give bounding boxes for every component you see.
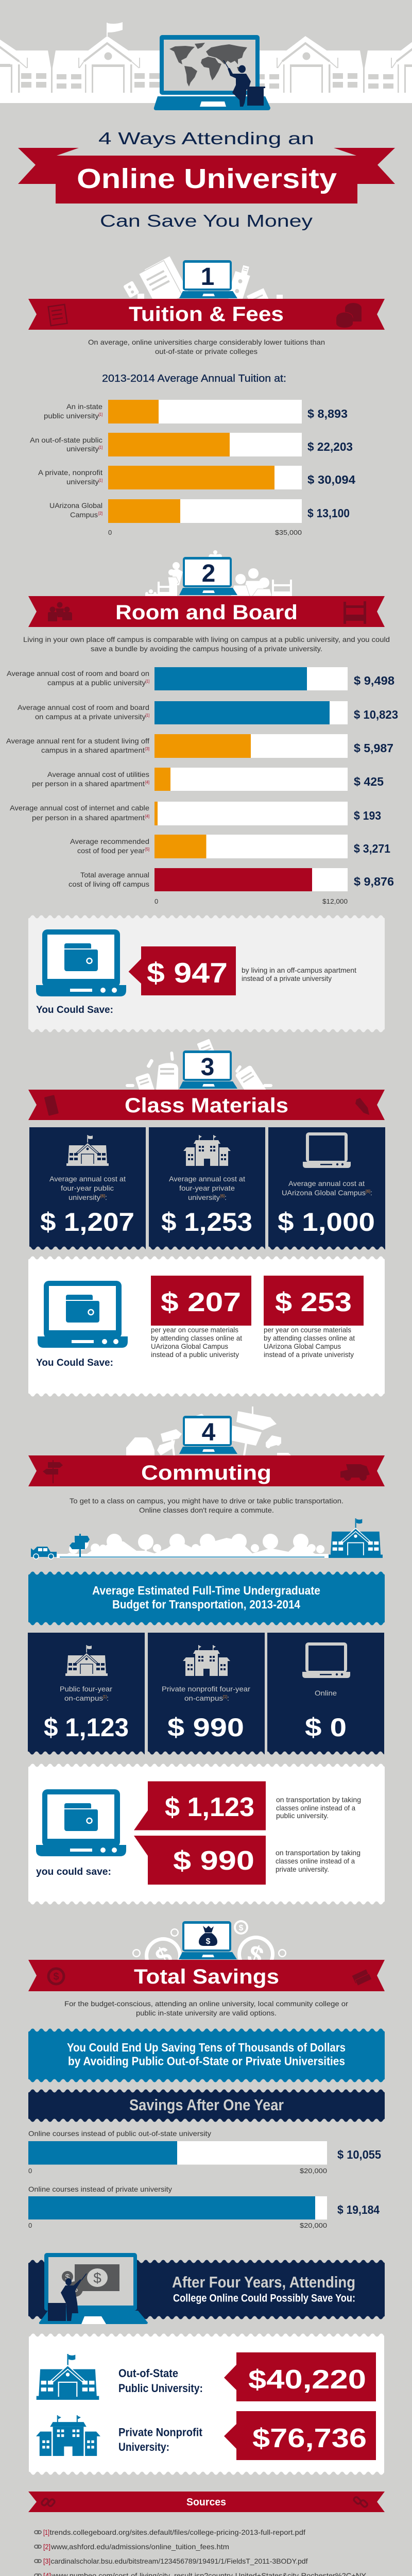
section 4 intro text: To get to a class on campus, you might have to drive or take public transportation. (70, 1497, 344, 1505)
savings box: 253: instead of a private univeristy (264, 1350, 354, 1359)
cost label: [6] (366, 1189, 370, 1194)
bar chart: savings out-of-state: $20,000 (300, 2167, 327, 2175)
bar row: food: $ 3,271 (354, 842, 390, 855)
icon: laptop number 1: 1 (201, 263, 214, 291)
cost panel: UArizona Global Campus (268, 1127, 385, 1250)
bar row: private room and board: [1] (146, 713, 149, 718)
price tag: 76,736 (224, 2411, 376, 2460)
section 2 heading: Room and Board (28, 550, 385, 627)
banner: Sources: Sources (186, 2497, 226, 2508)
bar chart: savings private (28, 2185, 380, 2229)
bar row: private nonprofit: $ 30,094 (307, 473, 355, 486)
illustration: road from car to campus (31, 1518, 383, 1559)
savings box: 207: instead of a public univeristy (151, 1350, 239, 1359)
savings note: classes online instead of a (276, 1804, 355, 1812)
title ribbon: Online University (18, 148, 395, 204)
icon: laptop with lecturer and money: $ (73, 2284, 78, 2294)
cost label: university (68, 1193, 100, 1201)
icon: school (65, 1645, 108, 1676)
bar row: food: Average recommended (70, 837, 149, 845)
chart heading: 2013-2014 Average Annual Tuition at: (102, 373, 286, 384)
icon: laptop (302, 1642, 350, 1678)
icon: laptop number 1 (179, 260, 237, 298)
cost label: four-year public (61, 1184, 114, 1192)
savings note: public university. (276, 1811, 329, 1820)
savings box: 253: per year on course materials (264, 1326, 351, 1334)
section 5 intro text: For the budget-conscious, attending an online university, local community college or (64, 1999, 348, 2008)
bar row: out-of-state public (30, 433, 353, 456)
icon: laptop with lecturer and money: $ (93, 2270, 101, 2286)
panel: you could save 947 (28, 915, 385, 1032)
bar chart: annual tuition (30, 400, 355, 536)
savings note (276, 1849, 360, 1873)
price tag: 40,220 (224, 2352, 376, 2401)
bar row: private room and board: Average annual cost of room and board (18, 703, 149, 711)
savings box: 207: by attending classes online at (151, 1334, 242, 1342)
icon: coins (132, 1920, 286, 1974)
cost value: $ 0 (305, 1713, 347, 1742)
bar row: private room and board (18, 701, 398, 724)
banner (28, 1090, 385, 1120)
cost label: : (105, 1193, 107, 1201)
savings box: 207: UArizona Global Campus (151, 1342, 228, 1350)
bar row: out-of-state public: university (66, 445, 99, 453)
label: you could save: (36, 1867, 111, 1877)
icon: university (183, 1135, 231, 1166)
axis labels: 0 (154, 897, 158, 905)
cost value: $ 1,000 (278, 1208, 375, 1236)
section 5 intro text: public in-state university are valid options. (136, 2009, 277, 2017)
banner: Total Savings (134, 1965, 279, 1988)
bar row: in-state public: $ 8,893 (307, 407, 348, 420)
cost value: $ 1,207 (40, 1208, 134, 1236)
cost label: Private nonprofit four-year (162, 1685, 250, 1693)
bar row: total off campus: cost of living off campus (68, 880, 149, 888)
axis labels (108, 529, 302, 536)
title line 1: 4 Ways Attending an (98, 129, 314, 148)
banner (28, 1960, 385, 1991)
bar row: in-state public: An in-state (66, 402, 102, 411)
bar row: internet and cable (10, 802, 381, 825)
sources list (35, 2528, 367, 2576)
bar row: public room and board: [1] (146, 679, 149, 684)
banner: Commuting (141, 1462, 271, 1484)
panel: you could save on transportation (28, 1764, 385, 1905)
savings note: instead of a private university (242, 974, 332, 982)
panel: you could save on materials (28, 1256, 385, 1397)
icon: laptop wallet (38, 1281, 128, 1348)
price tag: 1,123 (134, 1782, 266, 1830)
section 2 intro text: save a bundle by avoiding the campus housing of a private university. (91, 645, 322, 653)
bar row: internet and cable: [4] (145, 814, 149, 819)
icon: laptop number 2: 2 (202, 560, 215, 587)
cost label: university (188, 1193, 220, 1201)
section 3 heading: Class Materials (28, 1039, 385, 1120)
bar row: utilities: Average annual cost of utilities (47, 770, 149, 778)
bar chart: savings out-of-state: $ 10,055 (337, 2148, 381, 2161)
cost label: Online (315, 1689, 337, 1697)
savings note: on transportation by taking (276, 1795, 361, 1804)
cost label: [1] (103, 1694, 107, 1699)
label: Private Nonprofit (118, 2426, 203, 2439)
title line 3: Can Save You Money (100, 211, 313, 230)
cost label: [6] (220, 1194, 225, 1198)
cost label: [6] (100, 1194, 105, 1198)
cost panel: private (148, 1633, 265, 1755)
label: University: (118, 2441, 169, 2453)
bar row: UArizona Global Campus: Campus (70, 511, 98, 519)
section 2 intro text (23, 635, 390, 653)
price tag: 990 (134, 1836, 266, 1885)
cost value: $ 990 (167, 1713, 244, 1742)
savings box: 253 (264, 1276, 364, 1359)
bar chart: savings private: Online courses instead of private university (28, 2185, 172, 2193)
icon: laptop with world map and lecturer (154, 35, 270, 110)
bar row: utilities: $ 425 (354, 775, 384, 788)
panel: budget heading (28, 1571, 385, 1625)
icon: laptop with lecturer and money: $ (65, 2273, 70, 2282)
bar row: off-campus rent: [3] (145, 747, 149, 751)
cost label (49, 1175, 126, 1201)
cost label: : (227, 1694, 229, 1702)
banner: Class Materials (125, 1094, 288, 1117)
cost label: UArizona Global Campus (282, 1189, 366, 1197)
cost panel: four-year private (149, 1127, 265, 1250)
sources list: [1] (43, 2528, 49, 2536)
bar row: off-campus rent: $ 5,987 (354, 741, 393, 755)
bar row: in-state public: public university (44, 412, 99, 420)
price tag: 40,220: $40,220 (248, 2365, 366, 2395)
savings box: 207 (151, 1276, 251, 1359)
icon: coins: $ (151, 1940, 176, 1973)
bar chart: savings private: $20,000 (300, 2222, 327, 2229)
savings box: 253: by attending classes online at (264, 1334, 355, 1342)
cost value: $ 1,123 (44, 1713, 129, 1742)
banner: $ (53, 1971, 59, 1982)
section 1 intro text: On average, online universities charge considerably lower tuitions than (88, 338, 325, 346)
bar row: UArizona Global Campus: UArizona Global (49, 501, 102, 510)
icon: laptop (303, 1132, 351, 1168)
axis labels (154, 897, 348, 905)
bar row: off-campus rent: Average annual rent for a student living off (6, 737, 149, 745)
cost label: Average annual cost at (169, 1175, 245, 1183)
icon: laptop with money bag (179, 1921, 237, 1959)
icon: laptop wallet (36, 929, 126, 996)
savings box: 207: per year on course materials (151, 1326, 238, 1334)
sources list: www,ashford.edu/admissions/online_tuition_fees.htm (50, 2543, 229, 2551)
bar row: public room and board: campus at a public university (47, 679, 146, 687)
sources list: cardinalscholar.bsu.edu/bitstream/123456789/19491/1/FieldsT_2011-3BODY.pdf (50, 2557, 308, 2565)
bar row: food (70, 835, 390, 858)
bar row: private nonprofit: [1] (99, 478, 102, 483)
bar chart: savings out-of-state: 0 (28, 2167, 32, 2175)
sources list: [2] (43, 2543, 50, 2551)
bar row: out-of-state public: [1] (99, 445, 102, 450)
bar row: private room and board: on campus at a private university (35, 713, 146, 721)
banner (28, 596, 385, 627)
cost label (60, 1685, 112, 1702)
panel: budget heading: Average Estimated Full-Time Undergraduate (92, 1584, 320, 1597)
icon: laptop number 3: 3 (201, 1054, 214, 1081)
price tag: $ 947 (147, 957, 228, 989)
banner: Room and Board (115, 601, 298, 624)
icon: public school (37, 2354, 99, 2400)
icon: laptop number 4: 4 (202, 1419, 216, 1446)
bar row: internet and cable: Average annual cost of internet and cable (10, 804, 149, 812)
label: Public University: (118, 2382, 203, 2395)
icon: private university (36, 2415, 100, 2456)
cost label: Average annual cost at (49, 1175, 126, 1183)
icon: signpost (70, 1534, 90, 1557)
bar row: private nonprofit: university (66, 478, 99, 486)
label (118, 2367, 203, 2395)
cost label: four-year private (179, 1184, 235, 1192)
cost panel: public (28, 1633, 145, 1755)
price tag (129, 946, 236, 995)
section 5 intro text (64, 1999, 348, 2017)
panel: budget heading: Budget for Transportation, 2013-2014 (112, 1598, 300, 1611)
bar chart: room and board costs (6, 667, 398, 905)
label: You Could Save: (36, 1358, 113, 1368)
banner (28, 1455, 385, 1486)
savings note: classes online instead of a (276, 1857, 355, 1865)
heading text: College Online Could Possibly Save You: (173, 2293, 355, 2304)
bar row: UArizona Global Campus (49, 499, 350, 523)
bar chart: savings out-of-state (28, 2129, 381, 2175)
cost label: : (107, 1694, 109, 1702)
savings note (242, 966, 356, 982)
icon: university (183, 1645, 230, 1676)
cost label: : (225, 1193, 227, 1201)
icon: laptop with money bag: $ (206, 1937, 211, 1946)
bar row: UArizona Global Campus: [2] (98, 511, 102, 516)
icon: books and pencils (126, 1039, 272, 1102)
bar row: out-of-state public: $ 22,203 (307, 440, 353, 453)
cost panel: four-year public (29, 1127, 146, 1250)
sources list: [3] (43, 2557, 50, 2565)
icon: coins: $ (239, 1924, 244, 1933)
bar row: food: cost of food per year (77, 846, 145, 855)
bar row: in-state public (44, 400, 348, 423)
bar row: internet and cable: $ 193 (354, 809, 381, 822)
bar row: private room and board: $ 10,823 (354, 708, 398, 721)
cost label: on-campus (64, 1694, 103, 1702)
section 4 intro text: Online classes don't require a commute. (139, 1506, 274, 1514)
price tag: 1,123: $ 1,123 (165, 1792, 254, 1822)
panel: savings message: by Avoiding Public Out-of-State or Private Universities (68, 2055, 345, 2068)
axis labels: $12,000 (322, 897, 348, 905)
panel: four-year totals (29, 2333, 384, 2475)
cost label (162, 1685, 250, 1702)
section 4 heading: Commuting (28, 1406, 385, 1486)
banner: Tuition & Fees (129, 303, 284, 326)
section 4 intro text (70, 1497, 344, 1514)
section 2 intro text: Living in your own place off campus is comparable with living on campus at a public university, and you could (23, 635, 390, 643)
icon: coins: $ (244, 1939, 267, 1971)
cost label: on-campus (184, 1694, 223, 1702)
cost label (282, 1179, 372, 1197)
icon: papers and coins behind laptop (123, 256, 283, 319)
panel: after four years heading (28, 2253, 385, 2324)
header: campus skyline illustration (0, 22, 412, 103)
icon: school (66, 1135, 109, 1166)
icon: people and bunk beds (145, 550, 292, 596)
savings note: private university. (276, 1865, 329, 1873)
price tag: 76,736: $76,736 (252, 2424, 367, 2453)
cost value: $ 1,253 (161, 1208, 252, 1236)
bar chart: savings private: 0 (28, 2222, 32, 2229)
panel: savings after one year heading: Savings After One Year (129, 2096, 284, 2114)
section 1 intro text: out-of-state or private colleges (155, 347, 258, 355)
cost panel: online (267, 1633, 384, 1755)
bar row: in-state public: [1] (99, 412, 102, 417)
bar row: private nonprofit (38, 466, 355, 489)
cost label: Average annual cost at (288, 1179, 365, 1188)
bar row: total off campus: Total average annual (80, 871, 149, 879)
icon: signposts and cars (126, 1406, 291, 1459)
bar chart: savings out-of-state: Online courses instead of public out-of-state university (28, 2129, 211, 2138)
bar row: out-of-state public: An out-of-state public (30, 436, 102, 444)
label: Out-of-State (118, 2367, 178, 2380)
sources list: trends.collegeboard.org/sites.default/files/college-pricing-2013-full-report.pdf (49, 2528, 305, 2536)
bar row: off-campus rent (6, 734, 393, 758)
bar row: utilities: per person in a shared apartment (32, 779, 145, 788)
savings box: 207: $ 207 (161, 1287, 241, 1317)
savings box: 253: $ 253 (275, 1287, 352, 1317)
panel: savings message: You Could End Up Saving Tens of Thousands of Dollars (67, 2041, 346, 2054)
icon: car (31, 1547, 57, 1559)
cost label: Public four-year (60, 1685, 112, 1693)
bar chart: savings private: $ 19,184 (337, 2203, 380, 2216)
icon: laptop number 2 (179, 557, 237, 595)
axis labels: $35,000 (275, 529, 302, 536)
icon: campus building (329, 1518, 383, 1558)
savings note: on transportation by taking (276, 1849, 360, 1857)
price tag: 990: $ 990 (173, 1846, 254, 1876)
heading text: After Four Years, Attending (172, 2273, 355, 2291)
bar row: private nonprofit: A private, nonprofit (38, 468, 102, 477)
icon: laptop number 3 (179, 1050, 237, 1089)
bar row: total off campus (68, 868, 394, 891)
bar row: UArizona Global Campus: $ 13,100 (307, 506, 350, 520)
icon: laptop number 4 (179, 1416, 237, 1454)
savings box: 253: UArizona Global Campus (264, 1342, 341, 1350)
heading text (172, 2273, 355, 2304)
label: You Could Save: (36, 1005, 113, 1015)
cost label: : (370, 1189, 372, 1197)
section 5 heading: Total Savings (28, 1920, 385, 1991)
bar row: utilities (32, 768, 384, 791)
cost label (169, 1175, 245, 1201)
icon: laptop with lecturer and money (39, 2253, 148, 2324)
axis labels: 0 (108, 529, 112, 536)
bar row: public room and board: Average annual cost of room and board on (7, 669, 149, 677)
bar row: food: [5] (145, 847, 149, 852)
panel: savings message (28, 2028, 385, 2082)
cost label: [1] (223, 1694, 227, 1699)
section 1 heading: Tuition and Fees (28, 256, 385, 330)
bar row: utilities: [4] (145, 780, 149, 785)
panel: savings after one year heading (28, 2089, 385, 2122)
icon: laptop wallet (36, 1789, 126, 1856)
bar row: internet and cable: per person in a shared apartment (32, 814, 145, 822)
savings note: by living in an off-campus apartment (242, 966, 356, 974)
bar row: public room and board (7, 667, 394, 690)
bar row: public room and board: $ 9,498 (354, 674, 394, 687)
savings note (276, 1795, 361, 1820)
bar row: off-campus rent: campus in a shared apartment (41, 746, 145, 754)
banner (28, 299, 385, 330)
label (118, 2426, 203, 2453)
title ribbon: Online University: Online University (77, 163, 337, 194)
bar row: total off campus: $ 9,876 (354, 875, 394, 888)
section 1 intro text (88, 338, 325, 355)
banner: Sources (28, 2492, 385, 2512)
